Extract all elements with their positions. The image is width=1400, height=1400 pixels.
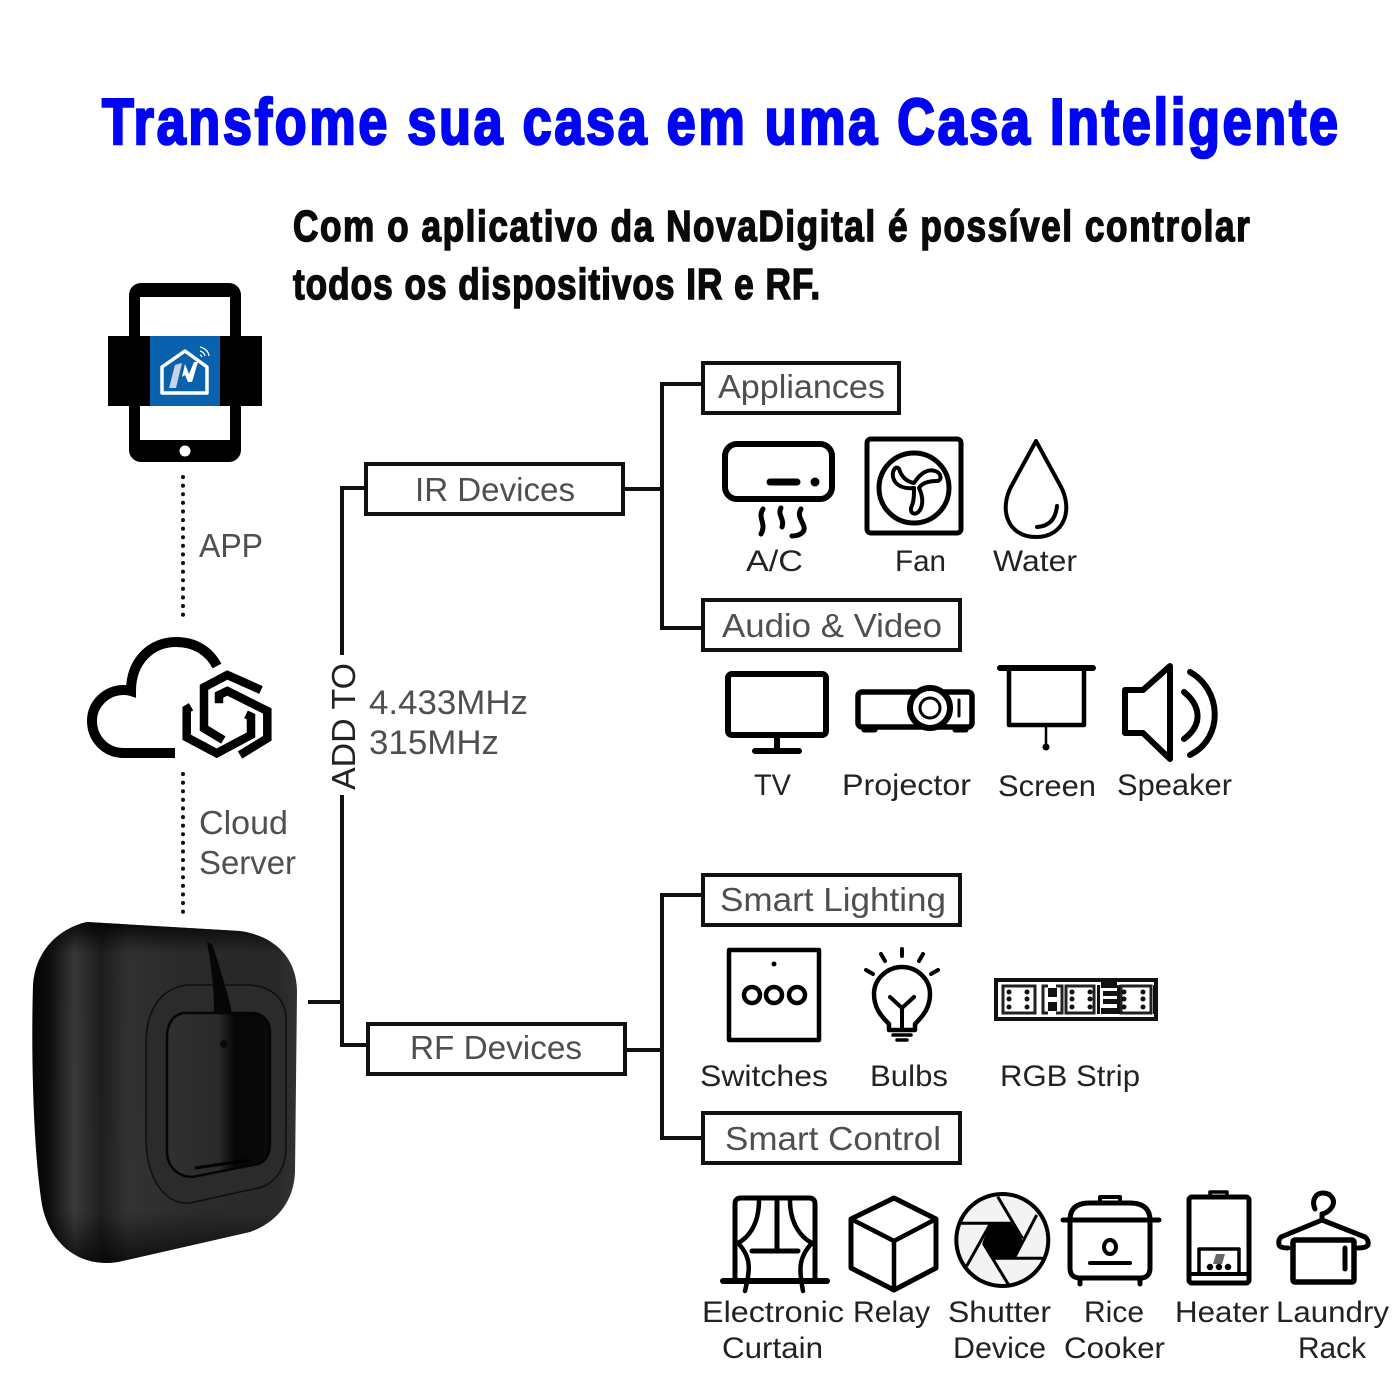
box: RF Devices	[368, 1024, 625, 1074]
label: Rice Cooker	[1064, 1296, 1165, 1365]
subtitle: Com o aplicativo da NovaDigital é possível controlar	[293, 202, 1250, 251]
icon: phone with app	[108, 283, 262, 462]
box: IR Devices	[366, 464, 623, 514]
icon: rice cooker	[1063, 1197, 1159, 1284]
label: A/C: A/C	[746, 545, 803, 578]
icon: wall switch	[729, 950, 819, 1040]
label: Heater: Heater	[1175, 1296, 1269, 1329]
icon: A/C	[725, 444, 832, 536]
label: Shutter Device	[948, 1296, 1051, 1365]
icon: water drop	[1006, 441, 1066, 537]
dotted line: app to cloud	[181, 477, 185, 616]
box: Appliances	[703, 363, 899, 413]
label: APP: APP	[199, 527, 263, 564]
label: frequencies: 315MHz	[369, 724, 499, 762]
box: Smart Control	[703, 1113, 960, 1163]
label: Fan: Fan	[895, 545, 946, 578]
box: Smart Lighting: Smart Lighting	[720, 881, 946, 918]
icon: shutter	[956, 1194, 1048, 1286]
label: Projector: Projector	[842, 769, 971, 802]
icon: RGB strip	[996, 980, 1156, 1019]
box: IR Devices: IR Devices	[415, 471, 575, 508]
label: Rice Cooker: Rice	[1084, 1296, 1144, 1329]
label: frequencies: 4.433MHz	[369, 684, 528, 722]
label: Cloud Server: Server	[199, 844, 296, 881]
icon: water heater	[1189, 1192, 1249, 1283]
label: Bulbs: Bulbs	[870, 1060, 948, 1093]
icon: projector	[858, 688, 972, 730]
subtitle	[293, 202, 1250, 309]
label: Relay: Relay	[853, 1296, 930, 1329]
box: Smart Control: Smart Control	[725, 1120, 941, 1157]
label: Rice Cooker: Cooker	[1064, 1332, 1165, 1365]
label: Laundry Rack	[1276, 1296, 1389, 1365]
box: Smart Lighting	[703, 875, 960, 925]
icon: speaker	[1125, 666, 1215, 759]
icon: laundry rack	[1279, 1193, 1368, 1282]
label: TV: TV	[754, 769, 791, 802]
box: Audio and Video: Audio & Video	[722, 607, 942, 644]
box: Audio and Video	[703, 600, 960, 650]
icon: light bulb	[866, 949, 938, 1040]
box: Appliances: Appliances	[718, 368, 885, 405]
icon: relay box	[851, 1198, 936, 1290]
connector: RF branch	[625, 895, 703, 1138]
label: ADD TO: ADD TO	[325, 663, 362, 790]
title: Transfome sua casa em uma Casa Inteligente	[102, 87, 1338, 158]
connector: IR branch	[623, 384, 703, 628]
label: Electronic Curtain	[702, 1296, 844, 1365]
label: Shutter Device: Shutter	[948, 1296, 1051, 1329]
dotted line: cloud to hub	[181, 774, 185, 912]
label: Screen: Screen	[998, 770, 1096, 803]
label: Cloud Server: Cloud	[199, 804, 288, 841]
label: Speaker: Speaker	[1117, 769, 1232, 802]
subtitle: todos os dispositivos IR e RF.	[293, 260, 820, 309]
label: frequencies	[369, 684, 528, 762]
label: Shutter Device: Device	[953, 1332, 1046, 1365]
label: Laundry Rack: Rack	[1298, 1332, 1367, 1365]
icon: TV	[728, 674, 826, 751]
label: Switches: Switches	[700, 1060, 828, 1093]
icon: fan	[867, 439, 961, 533]
icon: curtain	[723, 1198, 827, 1291]
connector: main bus	[342, 488, 368, 1045]
label: Electronic Curtain: Electronic	[702, 1296, 844, 1329]
label: RGB Strip: RGB Strip	[1000, 1060, 1140, 1093]
connector: hub to bus	[308, 1000, 341, 1004]
icon: projection screen	[1000, 668, 1093, 750]
label: Water: Water	[993, 545, 1077, 578]
label: Electronic Curtain: Curtain	[722, 1332, 823, 1365]
label: Cloud Server	[199, 804, 296, 881]
icon: cloud server	[92, 642, 267, 755]
label: Laundry Rack: Laundry	[1276, 1296, 1389, 1329]
box: RF Devices: RF Devices	[410, 1029, 582, 1066]
device: IR RF hub	[32, 922, 297, 1263]
